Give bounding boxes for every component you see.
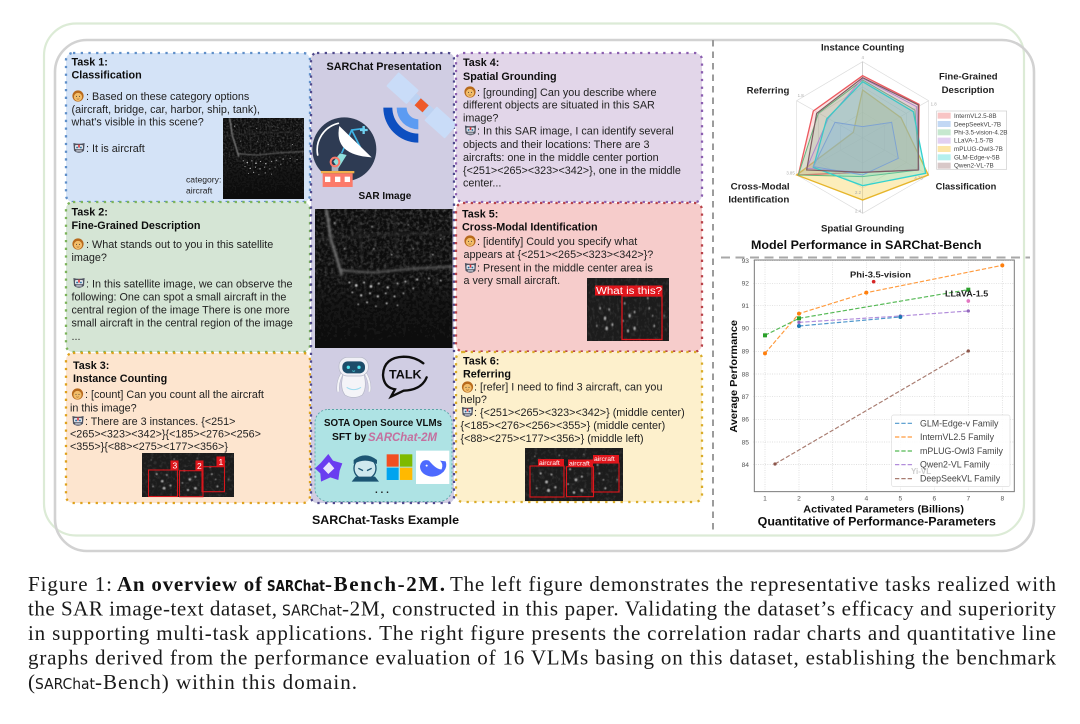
radar legend: GLM-Edge-v-5B — [954, 154, 1000, 161]
panel: task 4 spatial grounding: : In this SAR image, I can identify several — [477, 126, 674, 138]
x axis title: Activated Parameters (Billions) — [803, 504, 964, 515]
title: model performance: Model Performance in SARChat-Bench — [751, 238, 982, 252]
icon: ninja logo — [352, 455, 379, 482]
panel: task 4 spatial grounding: Spatial Grounding — [463, 71, 557, 83]
line chart legend: GLM-Edge-v Family — [920, 418, 999, 428]
series: Phi — [798, 80, 919, 177]
image: instance counting boxes — [148, 457, 224, 497]
series: GLM-Edge-v family — [797, 315, 902, 328]
panel: open source VLMs: SARChat-2M — [368, 430, 438, 444]
panel: task 3 instance counting: <265><323><342>}{<185><276><256> — [70, 429, 261, 441]
y axis ticks: 85 — [742, 439, 749, 446]
panel: task 2 fine-grained description: : In this satellite image, we can observe the — [86, 278, 292, 290]
point: LLaVA-1.5 — [945, 288, 989, 303]
series: DeepSeekVL family — [773, 349, 970, 466]
panel: sarchat presentation — [311, 53, 457, 503]
panel: task 5 cross-modal identification: Task 5: — [462, 209, 498, 221]
panel: task 6 referring — [456, 352, 702, 502]
y axis ticks: 86 — [742, 417, 749, 424]
x axis ticks: 3 — [831, 496, 835, 503]
panel: task 6 referring: Task 6: — [463, 356, 499, 368]
series: Qwen — [807, 78, 918, 172]
radar legend: Phi-3.5-vision-4.2B — [954, 129, 1007, 136]
y axis ticks: 90 — [742, 326, 749, 333]
panel: task 2 fine-grained description: ... — [72, 331, 80, 343]
panel: task 2 fine-grained description: central region of the image There is one more — [72, 304, 290, 316]
x axis ticks: 2 — [797, 496, 801, 503]
panel: task 1 classification: aircraft — [186, 186, 213, 196]
panel: task 4 spatial grounding: image? — [463, 113, 498, 125]
figure caption: -2M, constructed in this paper. Validating the dataset’s efficacy and superiority — [342, 596, 1056, 620]
panel: task 4 spatial grounding: different objects are situated in this SAR — [463, 100, 655, 112]
panel: task 5 cross-modal identification: a very small aircraft. — [464, 275, 560, 287]
line chart legend: DeepSeekVL Family — [920, 474, 1001, 484]
panel: task 6 referring: {<88><275><177><356>} (middle left) — [460, 433, 644, 445]
line chart legend: InternVL2.5 Family — [920, 432, 995, 442]
y axis ticks: 91 — [742, 303, 749, 310]
radar axis labels: Classification — [936, 181, 996, 191]
series: Qwen2-VL family — [797, 309, 970, 324]
panel: task 4 spatial grounding: objects and their locations: There are 3 — [463, 139, 649, 151]
panel: task 2 fine-grained description: small aircraft in the central region of the image — [72, 318, 293, 330]
panel: task 6 referring: help? — [460, 394, 487, 406]
figure caption: SARChat — [35, 675, 95, 693]
panel: task 3 instance counting: : There are 3 instances. {<251> — [85, 416, 235, 428]
icon: satellite — [383, 72, 457, 143]
radar legend: InternVL2.5-8B — [954, 113, 997, 120]
icon: Qwen star logo — [315, 454, 342, 482]
series: mPLUG — [797, 90, 928, 200]
image: referring boxes: aircraft — [539, 460, 560, 467]
radar axis labels: Description — [942, 85, 994, 95]
panel: task 4 spatial grounding: {<251><265><323><342>}, one in the middle — [463, 165, 681, 177]
series: InternVL2.5 family — [763, 263, 1004, 355]
panel: task 3 instance counting: <355>}{<88><275><177><356>} — [70, 441, 228, 453]
radar legend — [937, 111, 1007, 170]
panel: task 3 instance counting: Task 3: — [73, 360, 109, 372]
radar axis labels: Instance Counting — [821, 43, 904, 53]
panel: task 3 instance counting: Instance Counting — [73, 373, 167, 385]
series: mPLUG-Owl3 family — [763, 288, 970, 337]
figure caption: graphs derived from the performance evaluation of 16 VLMs basing on this dataset, establishing the benchmark — [28, 646, 1056, 670]
panel: task 1 classification: (aircraft, bridge, car, harbor, ship, tank), — [72, 104, 260, 116]
radar axis labels: Fine-Grained — [939, 72, 998, 82]
panel: task 1 classification: category: — [186, 174, 221, 184]
icon: radar dish — [312, 117, 376, 187]
panel: task 4 spatial grounding: center... — [463, 178, 501, 190]
panel: task 2 fine-grained description: : What stands out to you in this satellite — [86, 239, 273, 251]
figure caption: the SAR image-text dataset, — [28, 596, 277, 620]
x axis ticks: 5 — [898, 496, 902, 503]
image: referring boxes: aircraft — [569, 460, 590, 468]
panel: task 5 cross-modal identification: : [identify] Could you specify what — [477, 236, 637, 248]
panel: task 4 spatial grounding: Task 4: — [463, 57, 499, 69]
icon: robot — [338, 357, 370, 397]
x axis ticks — [763, 496, 1004, 503]
series: InternVL — [798, 76, 919, 175]
panel: task 4 spatial grounding — [456, 53, 702, 202]
panel: task 6 referring: Referring — [463, 369, 511, 381]
chart: radar model performance: 2.4 — [855, 208, 862, 213]
panel: sarchat presentation: SAR Image — [358, 191, 412, 202]
panel: task 5 cross-modal identification: Cross-Modal Identification — [462, 222, 598, 234]
point: Phi-3.5-vision: Phi-3.5-vision — [850, 269, 911, 279]
panel: task 6 referring: : {<251><265><323><342>} (middle center) — [474, 407, 685, 419]
panel: task 1 classification: : It is aircraft — [86, 143, 145, 155]
panel: task 3 instance counting: : [count] Can you count all the aircraft — [85, 389, 264, 401]
figure caption: SARChat — [282, 602, 342, 620]
line chart legend: mPLUG-Owl3 Family — [920, 446, 1003, 456]
figure caption: The left figure demonstrates the representative tasks realized with — [450, 572, 1056, 596]
point: LLaVA-1.5: LLaVA-1.5 — [945, 288, 989, 298]
panel: sarchat presentation: SARChat Presentation — [326, 61, 442, 73]
image: referring boxes: aircraft — [594, 456, 615, 463]
chart: radar model performance: 3.85 — [786, 170, 795, 175]
panel: task 1 classification: : Based on these category options — [86, 91, 250, 103]
x axis ticks: 7 — [966, 496, 970, 503]
panel: task 3 instance counting: in this image? — [70, 403, 137, 415]
chart: performance vs parameters line chart — [729, 258, 1014, 529]
image: instance counting boxes: 3 — [172, 460, 178, 470]
icon: talk bubble: TALK — [389, 368, 422, 382]
icon: talk bubble — [383, 357, 427, 397]
x axis ticks: 1 — [763, 496, 767, 503]
y axis ticks: 84 — [742, 462, 749, 469]
radar axis labels — [728, 43, 998, 234]
chart title: Quantitative of Performance-Parameters — [758, 516, 996, 529]
y axis ticks: 93 — [742, 258, 749, 265]
x axis ticks: 8 — [1000, 496, 1004, 503]
panel: task 1 classification: what's visible in this scene? — [70, 117, 204, 129]
figure caption: SARChat — [267, 577, 325, 595]
chart: radar model performance: 4.75 — [914, 175, 923, 180]
figure caption: ( — [28, 670, 35, 694]
image: instance counting boxes: 1 — [218, 457, 224, 467]
figure caption — [28, 572, 1056, 694]
panel: task 2 fine-grained description: Task 2: — [72, 207, 108, 219]
image: referring boxes — [530, 455, 619, 497]
image: what is this callout: What is this? — [596, 286, 663, 297]
line chart legend: Qwen2-VL Family — [920, 460, 990, 470]
chart: radar model performance: 2.2 — [855, 190, 862, 195]
image: instance counting boxes: 2 — [197, 461, 202, 471]
radar legend: mPLUG-Owl3-7B — [954, 146, 1003, 153]
line chart legend: Yi-VL — [911, 467, 931, 476]
chart: radar model performance: 4 — [861, 55, 864, 60]
x axis ticks: 6 — [932, 496, 936, 503]
chart: radar model performance: 1.8 — [798, 93, 804, 98]
panel: task 2 fine-grained description: Fine-Grained Description — [72, 220, 200, 232]
panel: task 6 referring: {<185><276><256><355>} (middle center) — [460, 420, 665, 432]
outer gray frame — [55, 40, 1034, 551]
radar axis labels: Referring — [747, 85, 789, 95]
point: Phi-3.5-vision — [850, 269, 911, 283]
y axis ticks: 87 — [742, 394, 749, 401]
radar legend: DeepSeekVL-7B — [954, 121, 1001, 128]
panel: task 5 cross-modal identification: : Present in the middle center area is — [477, 263, 653, 275]
series: GLM — [813, 82, 926, 186]
heading: tasks example: SARChat-Tasks Example — [312, 515, 459, 527]
figure caption: -Bench-2M. — [325, 572, 445, 596]
panel: task 2 fine-grained description: following: One can spot a small aircraft in the — [72, 292, 286, 304]
line chart legend — [892, 415, 1010, 487]
figure caption: -Bench) within this domain. — [95, 670, 357, 694]
panel: open source VLMs — [315, 410, 452, 502]
panel: open source VLMs: SFT by — [332, 432, 367, 443]
y axis ticks — [742, 258, 749, 469]
radar axis labels: Cross-Modal — [731, 181, 790, 191]
icon: Microsoft logo — [387, 454, 412, 480]
image: what is this callout — [595, 286, 663, 340]
radar axis labels: Spatial Grounding — [821, 224, 904, 234]
figure caption: An overview of — [117, 572, 263, 596]
x axis ticks: 4 — [864, 496, 868, 503]
y axis ticks: 92 — [742, 281, 749, 288]
panel: task 1 classification: Classification — [72, 70, 142, 82]
panel: task 5 cross-modal identification: appears at {<251><265><323><342>}? — [464, 249, 653, 261]
panel: task 5 cross-modal identification — [456, 203, 702, 352]
radar axis labels: Identification — [728, 195, 789, 205]
panel: task 1 classification: Task 1: — [72, 57, 108, 69]
panel: task 4 spatial grounding: : [grounding] Can you describe where — [477, 87, 656, 99]
panel: task 4 spatial grounding: aircrafts: one in the middle center portion — [463, 152, 659, 164]
panel: open source VLMs: . . . — [375, 485, 389, 496]
figure caption: Figure 1: — [28, 572, 112, 596]
radar legend: LLaVA-1.5-7B — [954, 138, 993, 145]
image: SAR scene — [315, 209, 452, 348]
radar legend: Qwen2-VL-7B — [954, 163, 994, 170]
y axis title: Average Performance — [729, 320, 740, 433]
series: DeepSeekVL — [813, 122, 898, 175]
panel: task 2 fine-grained description — [66, 202, 310, 352]
panel: open source VLMs: SOTA Open Source VLMs — [324, 418, 442, 429]
y axis ticks: 88 — [742, 371, 749, 378]
chart: radar model performance — [728, 43, 1007, 234]
icon: DeepSeek whale logo — [416, 451, 449, 484]
figure caption: in supporting multi-task applications. The right figure presents the correlation radar charts and quantitative line — [28, 621, 1056, 645]
y axis ticks: 89 — [742, 349, 749, 356]
chart: radar model performance: 1.8 — [931, 102, 937, 107]
panel: task 6 referring: : [refer] I need to find 3 aircraft, can you — [474, 382, 662, 394]
outer green frame — [44, 24, 1024, 536]
panel: task 1 classification — [66, 53, 310, 202]
panel: task 2 fine-grained description: image? — [72, 252, 107, 264]
series: LLaVA — [807, 78, 919, 172]
panel: task 3 instance counting — [66, 353, 310, 503]
